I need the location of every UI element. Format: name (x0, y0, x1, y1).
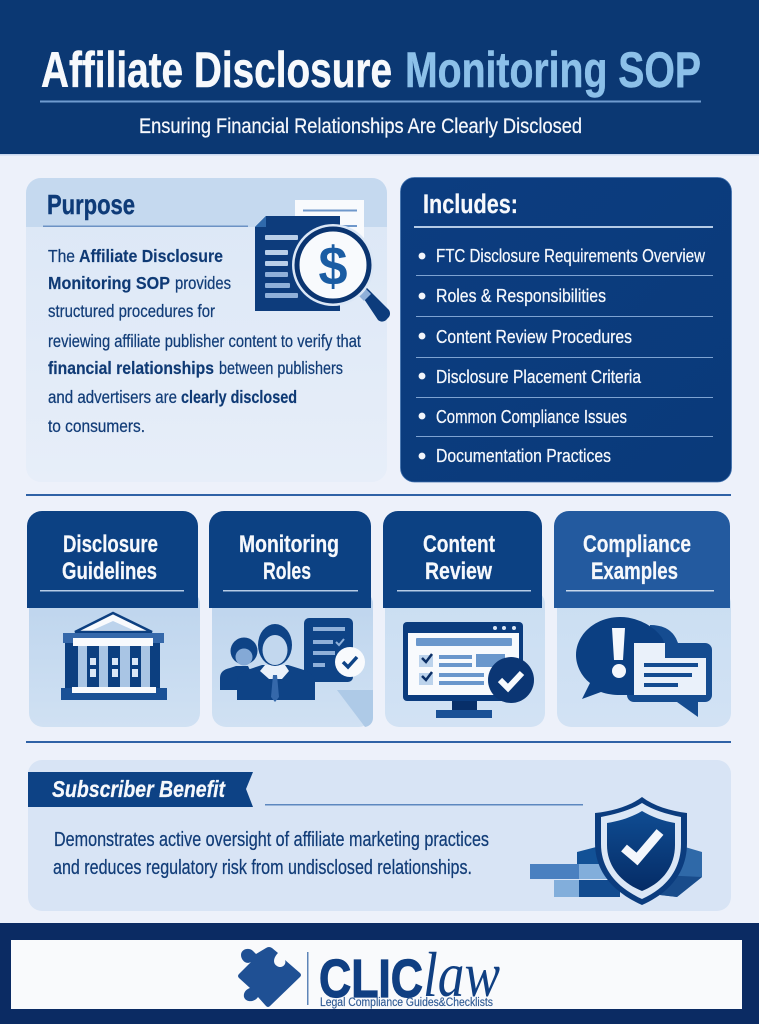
icon: monitor with checklist (403, 622, 534, 718)
includes list: Content Review Procedures (436, 326, 632, 347)
card heading: Compliance (583, 531, 691, 558)
icon: people with checklist (220, 618, 373, 727)
card heading: Review (425, 558, 492, 585)
purpose body text: financial relationships (48, 358, 214, 378)
title (41, 42, 701, 98)
icon: document under magnifying glass with dollar sign (255, 200, 390, 322)
ribbon heading (28, 772, 253, 807)
card: compliance examples (554, 511, 731, 727)
card heading: Content (423, 531, 495, 558)
icon: puzzle piece (238, 947, 301, 1007)
purpose body text: between publishers (219, 358, 343, 378)
purpose body text: The (48, 246, 75, 266)
logo wordmark (319, 939, 500, 1010)
includes list: FTC Disclosure Requirements Overview (436, 245, 706, 266)
panel: includes (400, 178, 732, 482)
heading: includes: Includes: (423, 189, 518, 219)
card: monitoring roles (209, 511, 373, 727)
card heading (62, 531, 158, 585)
purpose body text: provides (175, 273, 231, 293)
card heading: Examples (591, 558, 678, 585)
card heading (423, 531, 495, 585)
benefit text: Demonstrates active oversight of affiliate marketing practices (54, 829, 489, 851)
logo wordmark: CLIC (319, 949, 423, 1009)
purpose body text: clearly disclosed (181, 387, 297, 407)
card heading (583, 531, 691, 585)
icon: document under magnifying glass with dollar sign: $ (318, 235, 348, 297)
logo tagline: Legal Compliance Guides&Checklists (320, 997, 493, 1009)
panel: purpose (26, 178, 390, 432)
purpose body text: Monitoring SOP (48, 273, 170, 293)
includes list: Documentation Practices (436, 445, 611, 466)
purpose body text: Affiliate Disclosure (79, 246, 223, 266)
purpose body text: and advertisers are (48, 387, 177, 407)
card: disclosure guidelines (27, 511, 200, 727)
card heading: Monitoring (239, 531, 339, 558)
card heading: Disclosure (63, 531, 158, 558)
purpose body text (48, 246, 361, 436)
includes list (416, 245, 713, 466)
icon: shield with check mark (530, 797, 702, 905)
includes list: Disclosure Placement Criteria (436, 366, 642, 387)
purpose body text: reviewing affiliate publisher content to verify that (48, 331, 361, 351)
heading: purpose: Purpose (47, 189, 135, 220)
footer band (0, 923, 759, 1024)
card: content review (383, 511, 545, 727)
purpose body text: to consumers. (48, 416, 145, 436)
benefit text: and reduces regulatory risk from undisclosed relationships. (53, 857, 472, 879)
title: Affiliate Disclosure (41, 42, 392, 98)
subtitle: Ensuring Financial Relationships Are Clearly Disclosed (139, 115, 582, 138)
benefit text (53, 829, 489, 879)
purpose body text: structured procedures for (48, 301, 215, 321)
header banner (0, 0, 759, 156)
logo wordmark: law (423, 939, 500, 1010)
includes list: Common Compliance Issues (436, 406, 627, 427)
icon: speech bubbles with exclamation mark (576, 617, 712, 717)
ribbon heading: Subscriber Benefit (52, 776, 226, 802)
card heading: Guidelines (62, 558, 157, 585)
card heading: Roles (263, 558, 311, 585)
includes list: Roles & Responsibilities (436, 285, 606, 306)
icon: government building (61, 613, 167, 700)
footer logo: CLIClaw (11, 939, 742, 1010)
panel: subscriber benefit (28, 760, 731, 911)
card heading (239, 531, 339, 585)
